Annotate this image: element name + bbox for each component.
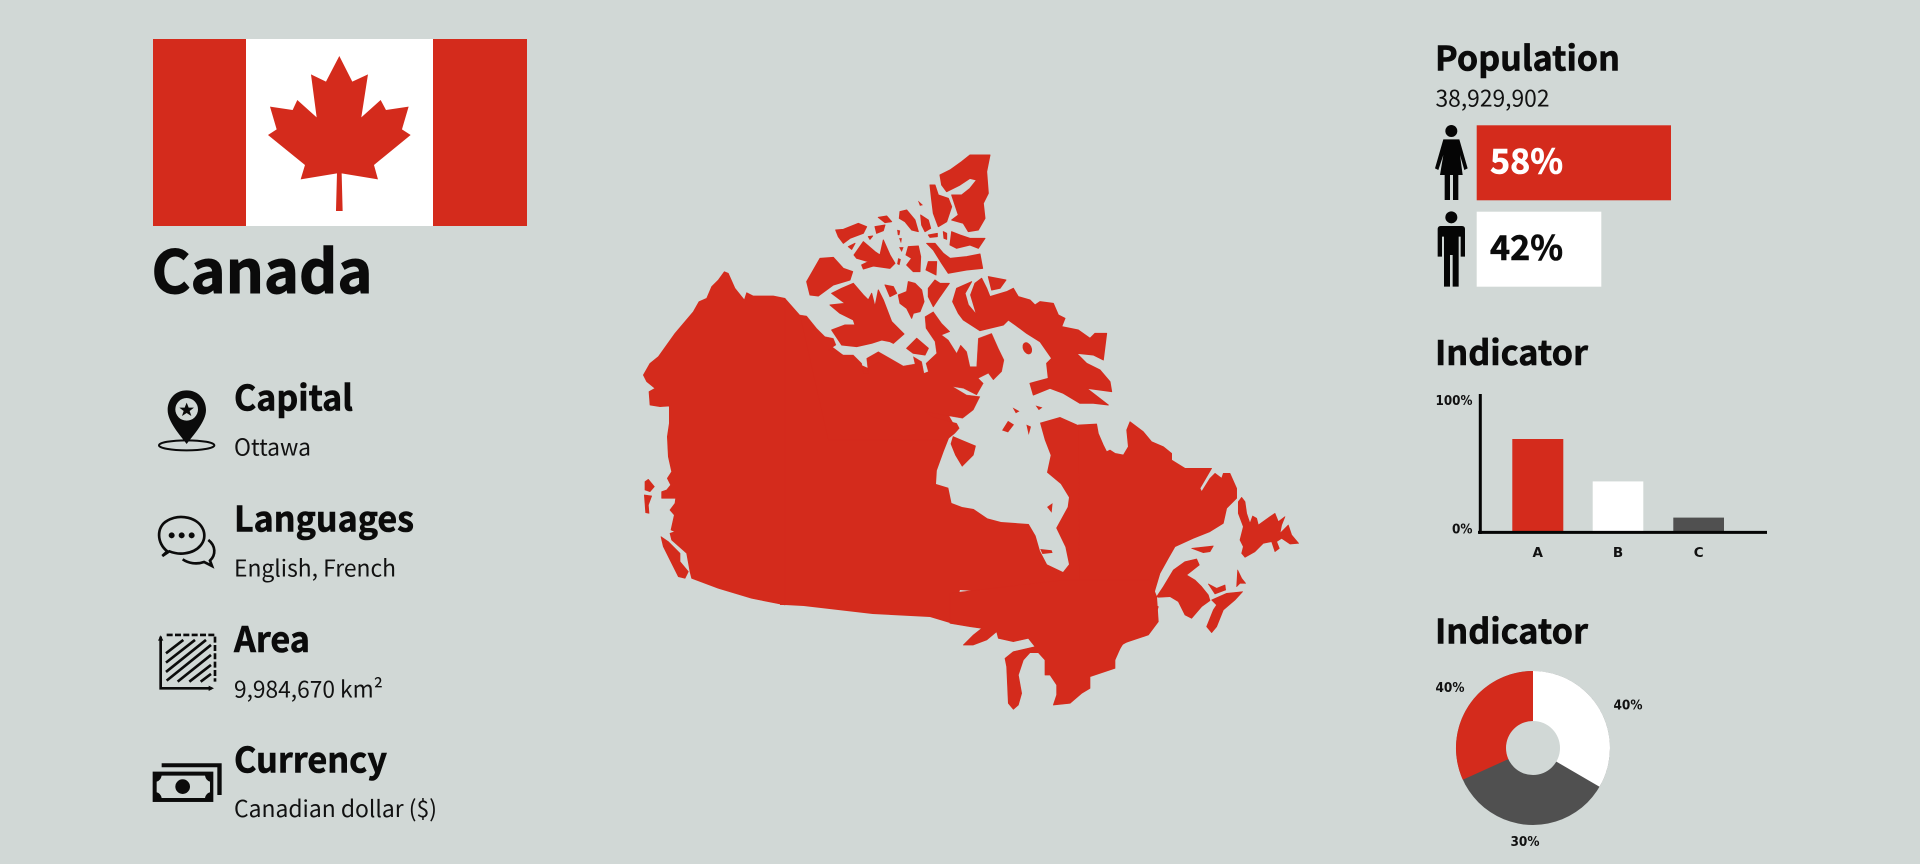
- donut chart: [1436, 671, 1643, 850]
- fact: capital: Capital: [234, 371, 353, 422]
- map of Canada: [643, 155, 1299, 709]
- bar: female share: [1477, 125, 1671, 200]
- fact: languages: English, French: [234, 550, 396, 584]
- bar chart: [1436, 393, 1767, 561]
- fact: area: [158, 612, 383, 705]
- western coast and islands: [643, 272, 785, 605]
- Hudson Bay islands: [951, 406, 1053, 554]
- arctic coast and archipelago: [800, 155, 1112, 440]
- icon: hatched area: [158, 635, 215, 691]
- fact: currency: Canadian dollar ($): [234, 790, 437, 824]
- bar chart: C: [1694, 545, 1704, 561]
- panel: bar chart indicator: [1435, 326, 1767, 561]
- heading: population: Population: [1435, 32, 1620, 81]
- icon: man: [1438, 211, 1465, 287]
- bar: male share: 42%: [1490, 221, 1563, 270]
- fact: area: Area: [233, 612, 310, 663]
- bar: female share: 58%: [1490, 134, 1563, 183]
- population figure: 38,929,902: [1436, 80, 1550, 114]
- donut chart: 40%: [1614, 698, 1643, 714]
- fact: capital: [159, 371, 353, 463]
- southern coast and Great Lakes: [950, 580, 1158, 709]
- title: Canada: [152, 225, 372, 310]
- panel: country facts: [153, 371, 437, 824]
- icon: maple leaf: [268, 56, 411, 211]
- flag of Canada: [153, 39, 527, 226]
- icon: banknotes: [153, 763, 222, 802]
- fact: languages: Languages: [234, 492, 414, 543]
- fact: languages: [159, 492, 414, 584]
- panel: donut chart indicator: [1435, 604, 1643, 850]
- bar chart: 100%: [1436, 393, 1473, 409]
- fact: currency: Currency: [234, 732, 387, 783]
- icon: speech bubbles: [159, 517, 214, 566]
- bar chart: 0%: [1452, 522, 1473, 538]
- eastern coast and islands: [1078, 422, 1299, 660]
- mainland interior and Hudson Bay shore: [780, 298, 1100, 623]
- fact: currency: [153, 732, 437, 824]
- bar: male share: [1477, 212, 1601, 287]
- icon: map pin: [159, 390, 214, 450]
- donut chart: 30%: [1510, 834, 1540, 850]
- fact: area: 9,984,670 km²: [234, 671, 383, 705]
- heading: indicator: Indicator: [1435, 604, 1588, 653]
- heading: indicator: Indicator: [1435, 326, 1588, 375]
- donut chart: 40%: [1436, 680, 1465, 696]
- bar chart: B: [1613, 545, 1623, 561]
- icon: woman: [1435, 125, 1468, 200]
- fact: capital: Ottawa: [234, 429, 311, 463]
- panel: population: [1435, 32, 1671, 287]
- bar chart: A: [1532, 545, 1543, 561]
